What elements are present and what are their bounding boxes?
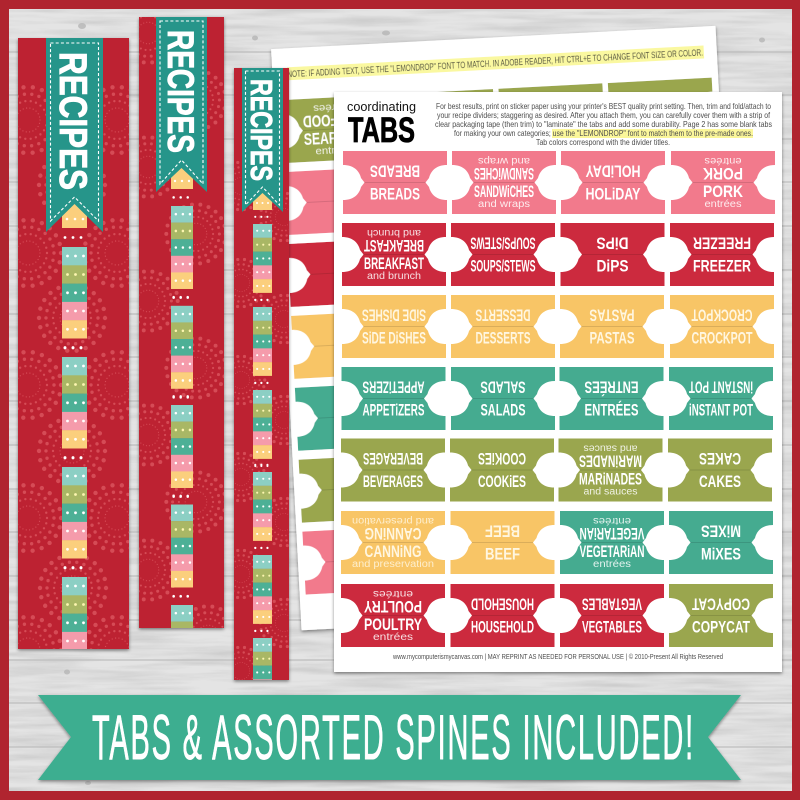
dotted circle pattern: [234, 161, 289, 680]
tab: vegtables: [560, 584, 664, 647]
tab: household: HOUSEHOLD: [471, 618, 534, 636]
tab: entrees: [560, 367, 664, 430]
tab: freezer: FREEZER: [693, 234, 751, 252]
back tab: seafood: entrées: [315, 144, 354, 157]
tab: soups/stews: [451, 223, 555, 286]
tab: soups/stews: SOUPS/STEWS: [470, 234, 536, 252]
tab: entrees: ENTRÉES: [584, 400, 638, 420]
tab: household: [450, 584, 554, 647]
back tabs: left column: [284, 167, 410, 595]
tab: marinades: [558, 438, 662, 502]
tab: pastas: [560, 295, 664, 358]
tab: vegetarian: entrées: [593, 559, 631, 570]
front sheet: coordinating tabs: [334, 92, 782, 672]
tab: copycat: [669, 584, 773, 647]
dotted circle pattern: [18, 85, 129, 649]
tab: crockpot: [670, 295, 774, 358]
tab: instant pot: [669, 367, 773, 430]
ribbon with recipes title: RECIPES: [51, 52, 94, 190]
tab: appetizers: [342, 367, 446, 430]
tab: desserts: DESSERTS: [476, 306, 530, 324]
tab: marinades: MARiNADES: [579, 452, 642, 470]
back tab: seafood: SEAFOOD: [302, 109, 363, 131]
tab: appetizers: APPETiZERS: [362, 378, 424, 396]
tab: pork: [671, 151, 775, 214]
spine 3: [232, 67, 292, 684]
tab: freezer: FREEZER: [693, 256, 751, 276]
tab: instant pot: iNSTANT POT: [689, 400, 753, 420]
ribbon with recipes title: RECIPES: [244, 79, 279, 181]
tab: pork: PORK: [703, 182, 744, 201]
tab: household: HOUSEHOLD: [471, 594, 534, 614]
tab: mixes: MiXES: [701, 522, 741, 540]
back tab: seafood: [280, 95, 387, 163]
tab: breakfast: BREAKFAST: [364, 254, 424, 273]
tab: sandwiches: and wraps: [478, 199, 530, 210]
tab: poultry: [341, 584, 445, 647]
tab: vegtables: VEGTABLES: [582, 594, 642, 614]
colour stripe column: [62, 200, 87, 679]
tab: canning: CANNiNG: [364, 524, 422, 543]
tab: appetizers: APPETiZERS: [362, 400, 424, 420]
tab: poultry: entrées: [373, 588, 413, 599]
colour stripe column: [171, 168, 193, 628]
tab: breakfast: BREAKFAST: [364, 236, 424, 255]
tab: entrees: ENTRÉES: [584, 378, 638, 396]
note highlight and text: [287, 45, 704, 80]
tab: breads: [343, 151, 447, 214]
colour stripe column: [253, 188, 272, 715]
tab: sandwiches: SANDWiCHES: [474, 182, 534, 201]
tab: beef: [450, 511, 554, 574]
tab: dips: DiPS: [596, 234, 628, 252]
tab: mixes: [669, 511, 773, 574]
tab: vegetarian: entrées: [593, 515, 631, 526]
tab: beef: BEEF: [485, 522, 520, 540]
tab: soups/stews: SOUPS/STEWS: [470, 256, 536, 276]
tab: beverages: BEVERAGES: [363, 449, 423, 468]
tab: poultry: POULTRY: [364, 615, 422, 634]
tab: marinades: and sauces: [584, 486, 638, 498]
tab: cakes: CAKES: [699, 449, 741, 468]
tab: side dishes: SiDE DiSHES: [362, 306, 426, 324]
spine 2: [137, 16, 226, 632]
bottom banner: [38, 695, 741, 780]
tab: salads: SALADS: [480, 378, 526, 396]
tab: canning: CANNiNG: [364, 542, 422, 561]
tab: breakfast: and brunch: [367, 227, 421, 238]
tab: vegetarian: VEGETARiAN: [580, 524, 644, 543]
back tab: seafood: SEAFOOD: [303, 127, 364, 149]
tab: crockpot: CROCKPOT: [691, 306, 752, 324]
tab: poultry: POULTRY: [364, 597, 422, 616]
tab: mixes: MiXES: [701, 544, 741, 564]
tab: holiday: HOLiDAY: [585, 162, 640, 180]
tab: vegetarian: [560, 511, 664, 574]
tab: dips: [560, 223, 664, 286]
tab: cookies: COOKiES: [478, 449, 526, 468]
tab: side dishes: SiDE DiSHES: [362, 328, 426, 348]
tab: breads: BREADS: [370, 184, 420, 204]
dotted circle pattern: [139, 17, 224, 628]
tab: sandwiches: [452, 151, 556, 214]
instructions text: Tab colors correspond with the divider titles.: [536, 137, 670, 147]
tab: desserts: [451, 295, 555, 358]
tab: sandwiches: SANDWiCHES: [474, 164, 534, 183]
tab: pork: entrées: [704, 155, 742, 166]
spine 1: [16, 38, 131, 652]
tab: beef: BEEF: [485, 544, 520, 564]
back sheet: blank tabs page: [271, 26, 746, 630]
tab: canning: and preservation: [352, 515, 434, 526]
tab: crockpot: CROCKPOT: [692, 328, 753, 348]
tab: vegetarian: VEGETARiAN: [580, 542, 644, 561]
tab: beverages: BEVERAGES: [363, 472, 423, 491]
heading: coordinating tabs: TABS: [348, 111, 415, 150]
tab: instant pot: iNSTANT POT: [689, 378, 753, 396]
tab: holiday: HOLiDAY: [586, 184, 641, 204]
tab: breakfast: [342, 223, 446, 286]
tab: sandwiches: and wraps: [478, 155, 530, 166]
tab: poultry: entrées: [373, 632, 413, 643]
tab: dips: DiPS: [596, 256, 628, 276]
tab: freezer: [670, 223, 774, 286]
tab: canning: and preservation: [352, 559, 434, 570]
back tab: seafood: entrées: [313, 101, 351, 113]
ribbon with recipes title: RECIPES: [160, 30, 201, 153]
tab: breakfast: and brunch: [367, 271, 421, 282]
back tabs: top row olive: [389, 78, 715, 157]
tab: salads: [451, 367, 555, 430]
tab: vegtables: VEGTABLES: [582, 618, 642, 636]
tab: breads: BREADS: [370, 162, 420, 180]
tab: marinades: MARiNADES: [579, 470, 642, 488]
tab: canning: [341, 511, 445, 574]
tab: pork: entrées: [704, 199, 742, 210]
tab: beverages: [341, 438, 445, 502]
tab: pastas: PASTAS: [590, 306, 634, 324]
tab: side dishes: [342, 295, 446, 358]
tab: pork: PORK: [702, 164, 743, 183]
tab: salads: SALADS: [480, 400, 526, 420]
tab: copycat: COPYCAT: [692, 594, 750, 614]
tab: marinades: and sauces: [584, 442, 638, 454]
tab: cookies: COOKiES: [478, 472, 526, 491]
heading: coordinating tabs: [347, 99, 416, 150]
tab: copycat: COPYCAT: [692, 618, 750, 636]
tab: pastas: PASTAS: [590, 328, 634, 348]
tab: desserts: DESSERTS: [476, 328, 530, 348]
tab: cakes: [668, 438, 772, 502]
tab: cookies: [450, 438, 554, 502]
heading: coordinating tabs: coordinating: [347, 99, 416, 114]
instructions text: [435, 101, 772, 147]
tab: holiday: [561, 151, 665, 214]
tab: cakes: CAKES: [699, 472, 741, 491]
ribbon with recipes title: [46, 38, 103, 232]
